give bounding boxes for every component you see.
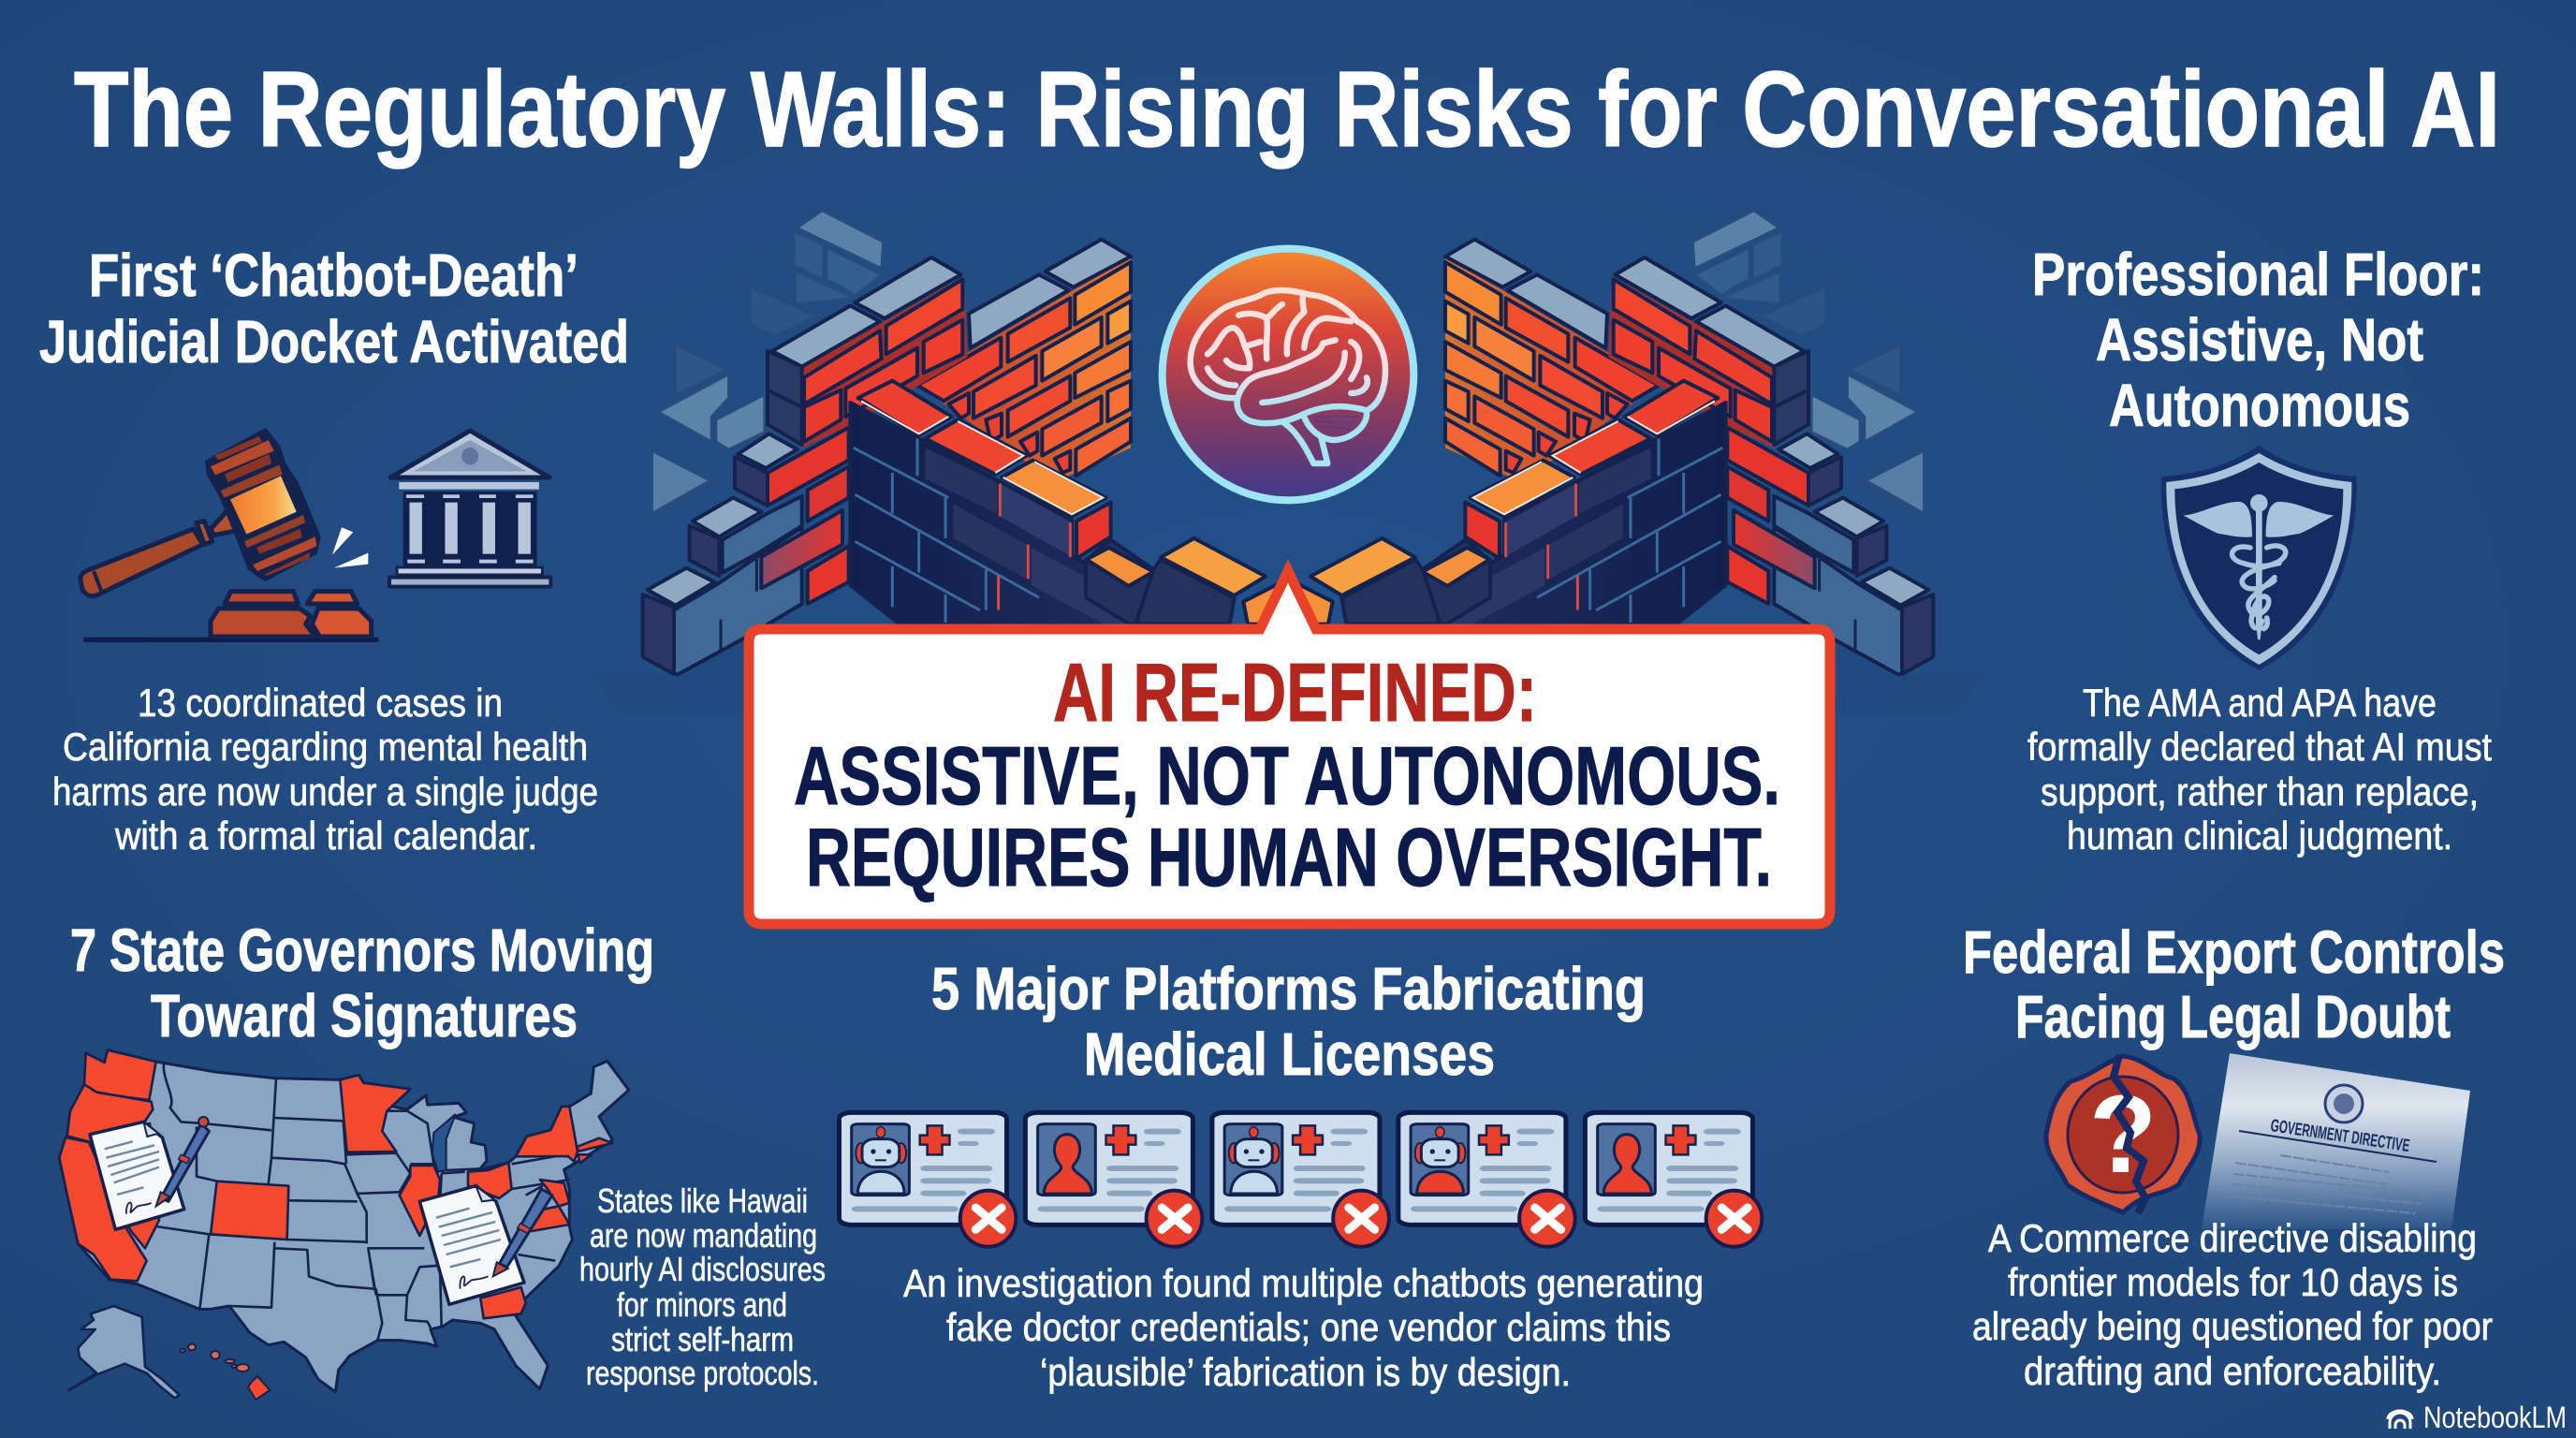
- icon: courthouse: [389, 431, 550, 587]
- heading: professional floor: Professional Floor:: [2032, 241, 2484, 308]
- text: export controls: frontier models for 10 days is: [2008, 1260, 2458, 1304]
- heading: judicial docket: Judicial Docket Activated: [39, 308, 629, 375]
- license card 2: [1025, 1112, 1202, 1247]
- government directive document: GOVERNMENT DIRECTIVE: [2269, 1116, 2411, 1156]
- text: medical licenses: An investigation found multiple chatbots generating: [903, 1261, 1704, 1305]
- heading: state governors: [70, 917, 654, 1049]
- text: states like Hawaii: for minors and: [617, 1285, 787, 1324]
- text: medical licenses: ‘plausible’ fabrication is by design.: [1040, 1350, 1571, 1394]
- icon: cracked wax seal: ?: [2089, 1073, 2157, 1196]
- license card 4: [1398, 1112, 1575, 1247]
- heading: medical licenses: [931, 955, 1646, 1088]
- heading: export controls: [1963, 918, 2505, 1050]
- text: states like Hawaii: [579, 1181, 826, 1392]
- text: medical licenses: fake doctor credentials; one vendor claims this: [946, 1305, 1671, 1349]
- text: states like Hawaii: hourly AI disclosures: [579, 1250, 826, 1288]
- icon: cracked wax seal: [2046, 1055, 2200, 1213]
- government directive document: [2202, 1053, 2470, 1229]
- text: states like Hawaii: response protocols.: [586, 1354, 819, 1392]
- text: professional floor: [2027, 681, 2492, 858]
- icon: medical shield: [2161, 446, 2357, 670]
- heading: state governors: Toward Signatures: [151, 982, 578, 1049]
- text: professional floor: The AMA and APA have: [2083, 681, 2437, 725]
- text: judicial docket: harms are now under a single judge: [52, 770, 598, 814]
- text: professional floor: support, rather than replace,: [2041, 770, 2479, 814]
- text: professional floor: human clinical judgment.: [2067, 814, 2452, 858]
- text: states like Hawaii: are now mandating: [590, 1216, 817, 1255]
- heading: medical licenses: Medical Licenses: [1084, 1020, 1495, 1088]
- text: export controls: drafting and enforceability.: [2024, 1349, 2441, 1393]
- text: states like Hawaii: States like Hawaii: [597, 1181, 808, 1220]
- callout: AI re-defined: [749, 571, 1830, 924]
- callout: AI re-defined: ASSISTIVE, NOT AUTONOMOUS.: [794, 729, 1780, 822]
- text: export controls: already being questioned for poor: [1972, 1304, 2493, 1348]
- text: professional floor: formally declared that AI must: [2027, 725, 2492, 769]
- heading: professional floor: Autonomous: [2109, 372, 2410, 439]
- heading: professional floor: [2032, 241, 2484, 439]
- US map with highlighted states: [59, 1050, 629, 1400]
- left wall illustration: [592, 211, 1288, 713]
- right wall illustration: [1288, 211, 1984, 713]
- heading: export controls: Facing Legal Doubt: [2015, 983, 2451, 1050]
- text: judicial docket: 13 coordinated cases in: [138, 681, 503, 725]
- callout: AI re-defined: REQUIRES HUMAN OVERSIGHT.: [806, 811, 1772, 903]
- text: judicial docket: with a formal trial calendar.: [114, 814, 537, 858]
- license card 5: [1585, 1112, 1762, 1247]
- heading: state governors: 7 State Governors Moving: [70, 917, 654, 984]
- fake license cards row: [839, 1112, 1762, 1247]
- heading: judicial docket: [39, 242, 629, 375]
- text: judicial docket: [52, 681, 598, 858]
- text: states like Hawaii: strict self-harm: [611, 1320, 794, 1358]
- text: judicial docket: California regarding mental health: [63, 725, 588, 769]
- text: export controls: A Commerce directive disabling: [1988, 1216, 2477, 1260]
- license card 1: [839, 1112, 1016, 1247]
- brain emblem: [1163, 249, 1413, 500]
- license card 3: [1212, 1112, 1389, 1247]
- icon: gavel and sound block: [80, 431, 378, 642]
- heading: judicial docket: First ‘Chatbot-Death’: [89, 242, 578, 309]
- text: medical licenses: [903, 1261, 1704, 1394]
- heading: professional floor: Assistive, Not: [2096, 306, 2423, 374]
- text: export controls: [1972, 1216, 2493, 1393]
- callout: AI re-defined: AI RE-DEFINED:: [1053, 646, 1537, 739]
- heading: medical licenses: 5 Major Platforms Fabricating: [931, 955, 1646, 1022]
